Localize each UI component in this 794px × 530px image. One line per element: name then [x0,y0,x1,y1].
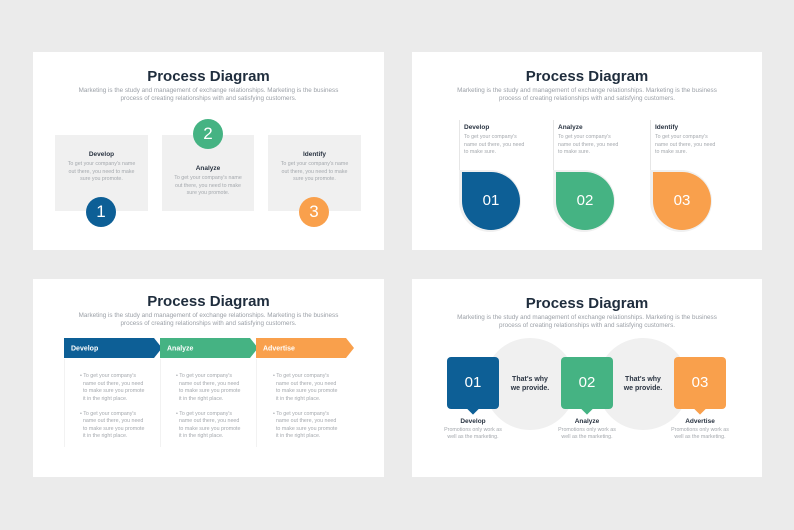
box: analyze: Analyze [196,165,220,172]
title: Process Diagram [147,68,270,85]
title: Process Diagram [526,68,648,85]
circle 1 [86,197,116,227]
square 03: 03 [692,374,708,391]
box: identify: sure you promote. [293,176,336,182]
box: analyze: To get your company's name [174,175,242,181]
step 01: To get your company's [464,134,517,140]
callout text 2: we provide. [624,385,662,392]
callout text 1 [510,376,549,392]
column 2 text [176,373,240,439]
box: develop: Develop [89,151,114,158]
label analyze [558,418,616,440]
step 03: To get your company's [655,134,708,140]
column 1 text: to make sure you promote [83,426,144,432]
square 02: 02 [579,374,595,391]
label develop: Develop [460,418,486,425]
subtitle: Marketing is the study and management of exchange relationships. Marketing is the business [457,87,717,94]
step 02: 02 [577,192,593,209]
box: identify: To get your company's name [281,161,348,167]
box: identify: out there, you need to make [282,168,347,174]
column 2 text: to make sure you promote [179,426,240,432]
label advertise: well as the marketing. [674,434,726,440]
circle 2: 2 [203,124,213,143]
square 01: 01 [465,374,481,391]
label analyze: Analyze [575,418,599,425]
circle 1: 1 [96,202,106,221]
column 1 text: • To get your company's [80,410,136,416]
box: develop: To get your company's name [68,161,135,167]
column 1 text: to make sure you promote [83,388,144,394]
column 2 text: • To get your company's [176,410,232,416]
label develop: Promotions only work as [444,427,502,433]
column 3 text: • To get your company's [273,410,329,416]
column 3 text: it in the right place. [276,433,320,439]
label advertise: Promotions only work as [671,427,729,433]
column 3 text: name out there, you need [276,418,336,424]
square 02 [561,357,613,409]
subtitle: process of creating relationships with and satisfying customers. [120,95,297,102]
box: develop: out there, you need to make [69,168,134,174]
column 1 text: • To get your company's [80,373,136,379]
subtitle: Marketing is the study and management of exchange relationships. Marketing is the business [79,87,338,94]
arrows [64,338,354,447]
column 2 text: • To get your company's [176,373,232,379]
arrows: Advertise [263,346,295,352]
step 03: 03 [674,192,690,209]
subtitle [457,314,717,329]
column 3 text: to make sure you promote [276,388,337,394]
column 1 text [80,373,144,439]
circle 3: 3 [309,202,319,221]
column 3 text: to make sure you promote [276,426,337,432]
subtitle: Marketing is the study and management of exchange relationships. Marketing is the business [79,312,338,319]
step 03 [650,120,715,232]
step 02: To get your company's [558,134,611,140]
column 2 text: to make sure you promote [179,388,240,394]
box: analyze [162,135,254,211]
column 2 text: name out there, you need [179,418,239,424]
column 1 text: it in the right place. [83,396,127,402]
box: analyze: out there, you need to make [175,182,241,188]
step 02: name out there, you need [558,142,618,148]
step 02 [553,120,618,232]
box: identify [268,135,361,211]
column 2 text: it in the right place. [179,396,223,402]
arrows: Develop [71,346,98,352]
gray circle 1 [484,338,576,430]
step 03: name out there, you need [655,142,715,148]
step 01: name out there, you need [464,142,524,148]
callout text 2: That's why [625,376,661,383]
arrows: Analyze [167,346,194,352]
box: develop [55,135,148,211]
panel: bottom-right [412,279,762,477]
circle 2 [193,119,223,149]
label analyze: Promotions only work as [558,427,616,433]
callout text 2 [624,376,662,392]
column 3 text: name out there, you need [276,380,336,386]
step 02: to make sure. [558,149,590,155]
step 02: Analyze [558,124,583,131]
callout text 1: That's why [512,376,548,383]
square 03 [674,357,726,409]
box: identify: Identify [303,151,326,158]
column 1 text: it in the right place. [83,433,127,439]
column 1 text: name out there, you need [83,418,143,424]
subtitle [457,87,717,102]
step 01: to make sure. [464,149,496,155]
title: Process Diagram [147,293,270,310]
subtitle [79,312,338,327]
subtitle: process of creating relationships with and satisfying customers. [499,95,675,102]
column 2 text: name out there, you need [179,380,239,386]
column 3 text: it in the right place. [276,396,320,402]
gray circle 2 [597,338,689,430]
column 3 text: • To get your company's [273,373,329,379]
subtitle: process of creating relationships with and satisfying customers. [499,322,675,329]
label advertise [671,418,729,440]
subtitle: Marketing is the study and management of exchange relationships. Marketing is the business [457,314,717,321]
step 03: to make sure. [655,149,687,155]
column 1 text: name out there, you need [83,380,143,386]
column 2 text: it in the right place. [179,433,223,439]
title: Process Diagram [526,295,648,312]
step 01 [459,120,524,232]
square 01 [447,357,499,409]
label analyze: well as the marketing. [561,434,613,440]
step 01: Develop [464,124,489,131]
subtitle: process of creating relationships with and satisfying customers. [120,320,297,327]
label advertise: Advertise [685,418,715,425]
callout text 1: we provide. [511,385,549,392]
step 01: 01 [483,192,499,209]
panel: top-right [412,52,762,250]
column 3 text [273,373,338,439]
step 03: Identify [655,124,678,131]
box: analyze: sure you promote. [187,190,229,196]
panel: top-left [33,52,384,250]
label develop: well as the marketing. [447,434,499,440]
subtitle [79,87,338,102]
box: develop: sure you promote. [80,176,123,182]
label develop [444,418,502,440]
panel: bottom-left [33,279,384,477]
circle 3 [299,197,329,227]
